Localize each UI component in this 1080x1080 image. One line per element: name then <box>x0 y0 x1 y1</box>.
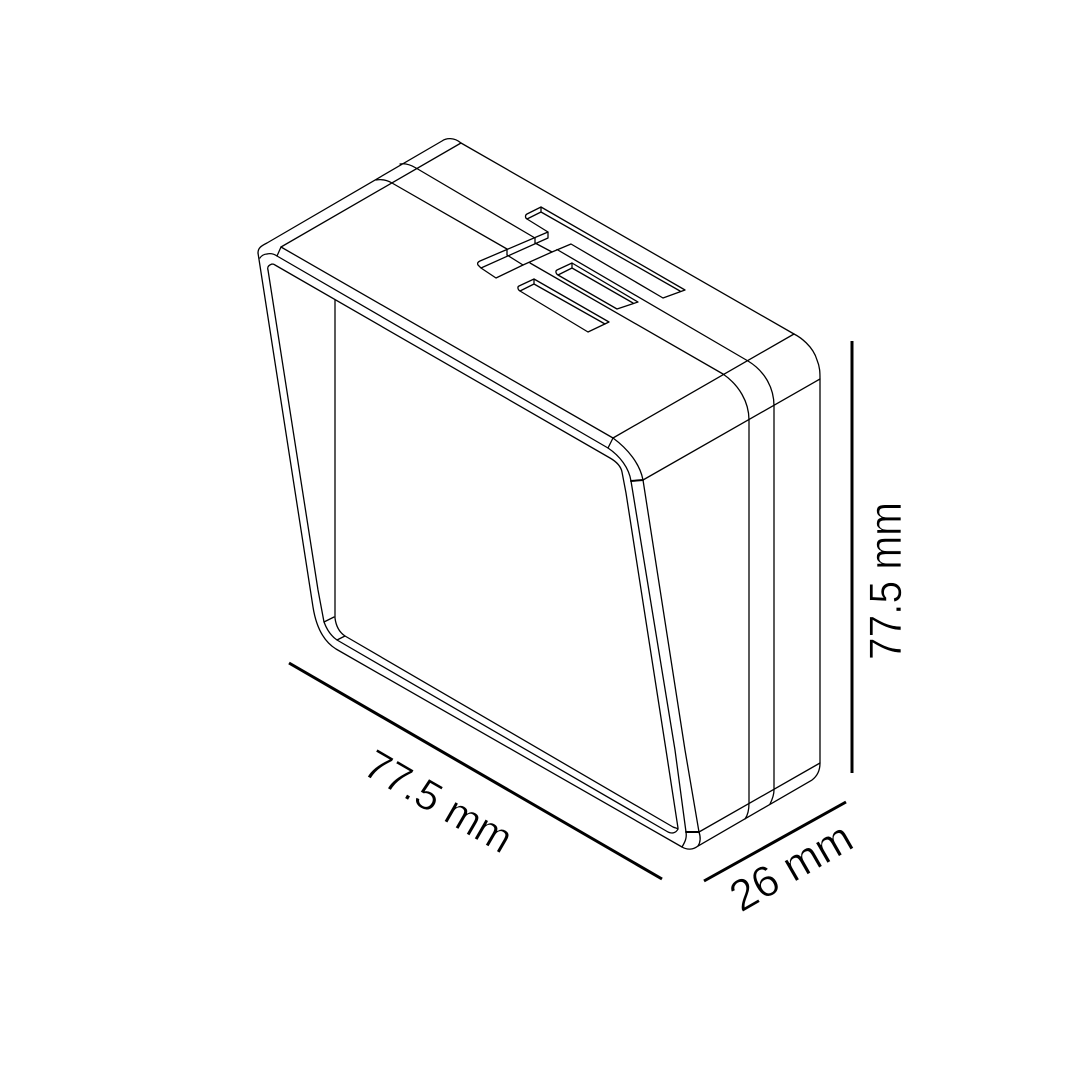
dimension: height line <box>850 341 854 773</box>
top connector slots <box>478 207 685 332</box>
side face <box>698 334 820 846</box>
dimension: width line <box>289 663 662 879</box>
front frame <box>258 247 700 849</box>
dimension: depth line <box>704 802 846 881</box>
slot: lower port <box>518 279 609 332</box>
depth label: 26 mm <box>722 813 861 922</box>
device line drawing <box>258 139 820 849</box>
height label: 77.5 mm <box>860 502 911 660</box>
slot: middle port <box>556 263 638 309</box>
slot: L-shaped cut-out <box>478 207 685 298</box>
width label: 77.5 mm <box>356 740 521 862</box>
top face <box>258 139 820 480</box>
